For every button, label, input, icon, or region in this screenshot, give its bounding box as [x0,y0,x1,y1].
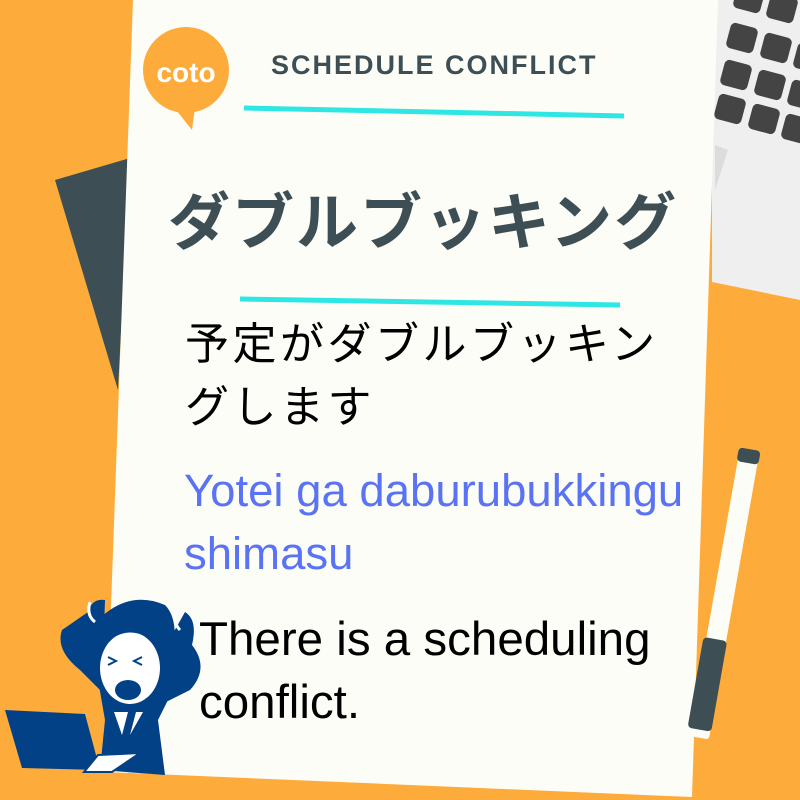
marker pen [686,447,761,740]
text: english [199,613,651,729]
heading: schedule conflict: SCHEDULE CONFLICT [271,50,598,80]
text: japanese sentence [185,320,659,432]
cyan line middle [240,299,620,305]
notebook behind paper [55,158,130,390]
icon: stressed man at laptop [5,600,200,775]
text: romaji: Yotei ga daburubukkingu [184,465,683,516]
cyan line top [244,108,624,116]
text: romaji [184,465,683,579]
paper [105,0,718,797]
laptop keyboard corner [712,0,800,300]
text: japanese sentence: グします [185,383,375,432]
logo: coto: coto [156,57,216,88]
text: romaji: shimasu [184,528,353,579]
text: english: conflict. [199,676,360,729]
title: japanese: ダブルブッキング [168,189,678,258]
text: english: There is a scheduling [199,613,651,666]
text: japanese sentence: 予定がダブルブッキン [185,320,659,369]
logo: coto [143,27,229,130]
